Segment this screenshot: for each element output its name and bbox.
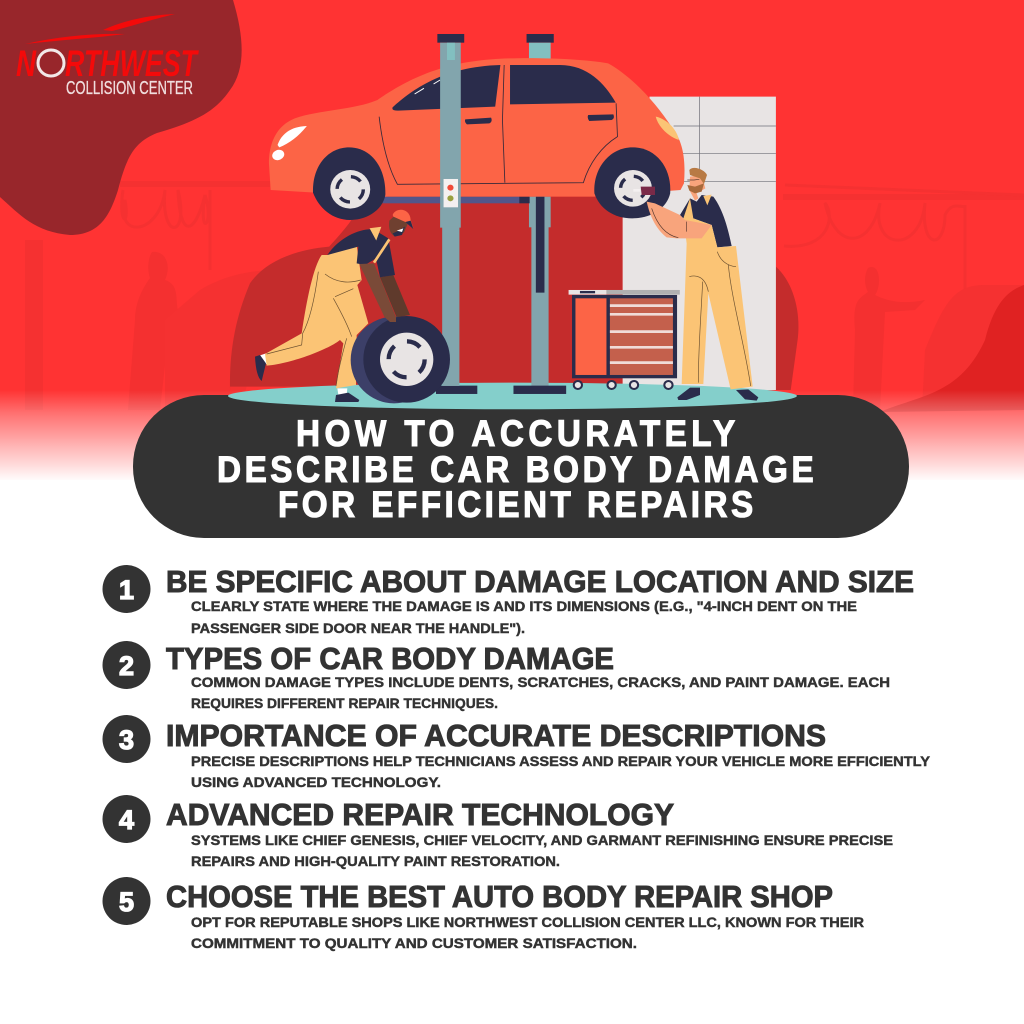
mechanic right with tool xyxy=(633,168,758,401)
item 3 xyxy=(102,715,931,790)
logo blob xyxy=(0,0,242,235)
item 1: BE SPECIFIC ABOUT DAMAGE LOCATION AND SIZE xyxy=(166,564,914,599)
lift rear post xyxy=(436,34,566,394)
item 2: TYPES OF CAR BODY DAMAGE xyxy=(166,641,614,676)
item 5: OPT FOR REPUTABLE SHOPS LIKE NORTHWEST COLLISION CENTER LLC, KNOWN FOR THEIR xyxy=(191,914,864,930)
logo: Northwest Collision Center: COLLISION CENTER xyxy=(66,78,193,98)
item 2: 2 xyxy=(119,651,134,681)
item 2: COMMON DAMAGE TYPES INCLUDE DENTS, SCRATCHES, CRACKS, AND PAINT DAMAGE. EACH xyxy=(191,674,890,690)
garage wall xyxy=(623,97,776,390)
lift arm xyxy=(383,197,530,203)
item 5: COMMITMENT TO QUALITY AND CUSTOMER SATISFACTION. xyxy=(191,935,637,951)
item 5: 5 xyxy=(119,887,134,917)
front wheel xyxy=(313,147,385,220)
item 3: PRECISE DESCRIPTIONS HELP TECHNICIANS ASSESS AND REPAIR YOUR VEHICLE MORE EFFICIENTLY xyxy=(191,753,931,769)
item 1 xyxy=(102,564,914,636)
title banner xyxy=(133,395,909,538)
item 3: 3 xyxy=(119,725,134,755)
item 2 xyxy=(102,641,890,711)
item 5: CHOOSE THE BEST AUTO BODY REPAIR SHOP xyxy=(166,879,833,914)
item 4 xyxy=(102,795,893,869)
logo: Northwest Collision Center xyxy=(16,14,199,98)
logo: Northwest Collision Center: RTHWEST xyxy=(65,43,199,84)
item 4: SYSTEMS LIKE CHIEF GENESIS, CHIEF VELOCITY, AND GARMANT REFINISHING ENSURE PRECISE xyxy=(191,832,893,848)
item 4: ADVANCED REPAIR TECHNOLOGY xyxy=(166,797,674,832)
rear wheel xyxy=(594,147,670,218)
item 1: CLEARLY STATE WHERE THE DAMAGE IS AND ITS DIMENSIONS (E.G., "4-INCH DENT ON THE xyxy=(191,598,857,614)
dark red backdrop xyxy=(230,197,623,390)
item 5 xyxy=(102,877,864,951)
lift front post xyxy=(437,34,464,386)
item 3: IMPORTANCE OF ACCURATE DESCRIPTIONS xyxy=(166,718,826,753)
illustration: car on lift xyxy=(228,34,798,409)
logo: Northwest Collision Center: N xyxy=(16,43,37,84)
item 1: PASSENGER SIDE DOOR NEAR THE HANDLE"). xyxy=(191,620,525,636)
tool cart xyxy=(569,290,680,389)
title text xyxy=(217,413,814,525)
floor xyxy=(228,383,797,409)
item 3: USING ADVANCED TECHNOLOGY. xyxy=(191,774,441,790)
item 4: REPAIRS AND HIGH-QUALITY PAINT RESTORATION. xyxy=(191,853,560,869)
item 1: 1 xyxy=(119,575,134,605)
title text: FOR EFFICIENT REPAIRS xyxy=(278,484,753,525)
title text: HOW TO ACCURATELY xyxy=(296,413,735,454)
title text: DESCRIBE CAR BODY DAMAGE xyxy=(217,449,814,490)
tyre xyxy=(351,316,450,403)
mechanic left pushing tyre xyxy=(255,210,450,403)
car xyxy=(269,58,685,220)
item 4: 4 xyxy=(119,805,134,835)
item 2: REQUIRES DIFFERENT REPAIR TECHNIQUES. xyxy=(191,695,498,711)
